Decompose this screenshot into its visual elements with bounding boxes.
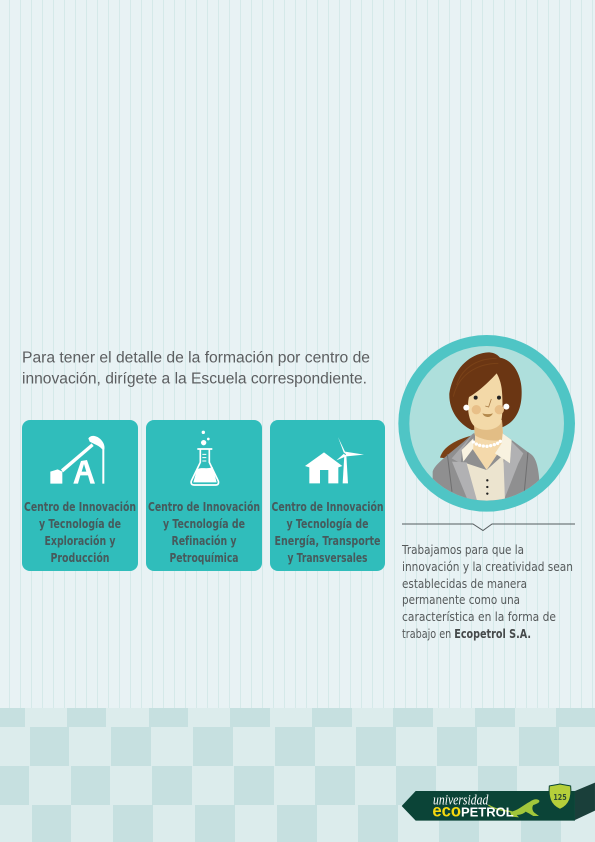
intro text: Para tener el detalle de la formación por centro de (22, 350, 370, 366)
logo wordmark (432, 793, 514, 821)
divider with notch (402, 524, 575, 530)
pearl necklace (472, 440, 502, 448)
card title: Centro de Innovación (24, 500, 136, 514)
card title (24, 500, 136, 565)
icon: iguana (488, 799, 539, 817)
quote text (401, 543, 573, 641)
card title: y Transversales (288, 551, 368, 565)
card: Energía, Transporte y Transversales (270, 420, 385, 571)
logo wordmark: PETROL (461, 805, 514, 820)
icon: house and wind turbine (305, 437, 364, 483)
intro text: innovación, dirígete a la Escuela correspondiente. (22, 370, 367, 388)
quote text: permanente como una (402, 593, 520, 607)
card title: Petroquímica (170, 551, 238, 565)
card title: Refinación y (172, 534, 237, 548)
card title: Producción (50, 551, 110, 565)
card title: y Tecnología de (39, 517, 121, 531)
quote text: establecidas de manera (402, 577, 527, 591)
card title (148, 500, 260, 565)
icon: laboratory flask (191, 431, 219, 485)
badge: 125 shield (549, 784, 571, 809)
logo: Universidad Ecopetrol banner (402, 783, 595, 821)
card: Refinación y Petroquímica (146, 420, 262, 571)
card title: Centro de Innovación (272, 500, 384, 514)
checkered footer band (0, 708, 595, 842)
quote text: Trabajamos para que la (401, 543, 524, 557)
badge: 125 shield: 125 (553, 793, 567, 802)
portrait: woman in teal circle (398, 335, 575, 512)
card title: y Tecnología de (286, 517, 368, 531)
card title (272, 500, 384, 565)
icon: oil pumpjack (50, 436, 104, 484)
card: Exploración y Producción (22, 420, 138, 571)
card title: y Tecnología de (163, 517, 245, 531)
card title: Centro de Innovación (148, 500, 260, 514)
quote text: trabajo en Ecopetrol S.A. (402, 627, 531, 641)
quote text: innovación y la creatividad sean (402, 560, 573, 574)
card title: Energía, Transporte (274, 534, 380, 548)
logo wordmark: universidad (433, 793, 489, 809)
intro text (22, 350, 370, 388)
logo wordmark: eco (432, 801, 461, 821)
card title: Exploración y (44, 534, 116, 548)
quote text: característica en la forma de (402, 610, 556, 624)
